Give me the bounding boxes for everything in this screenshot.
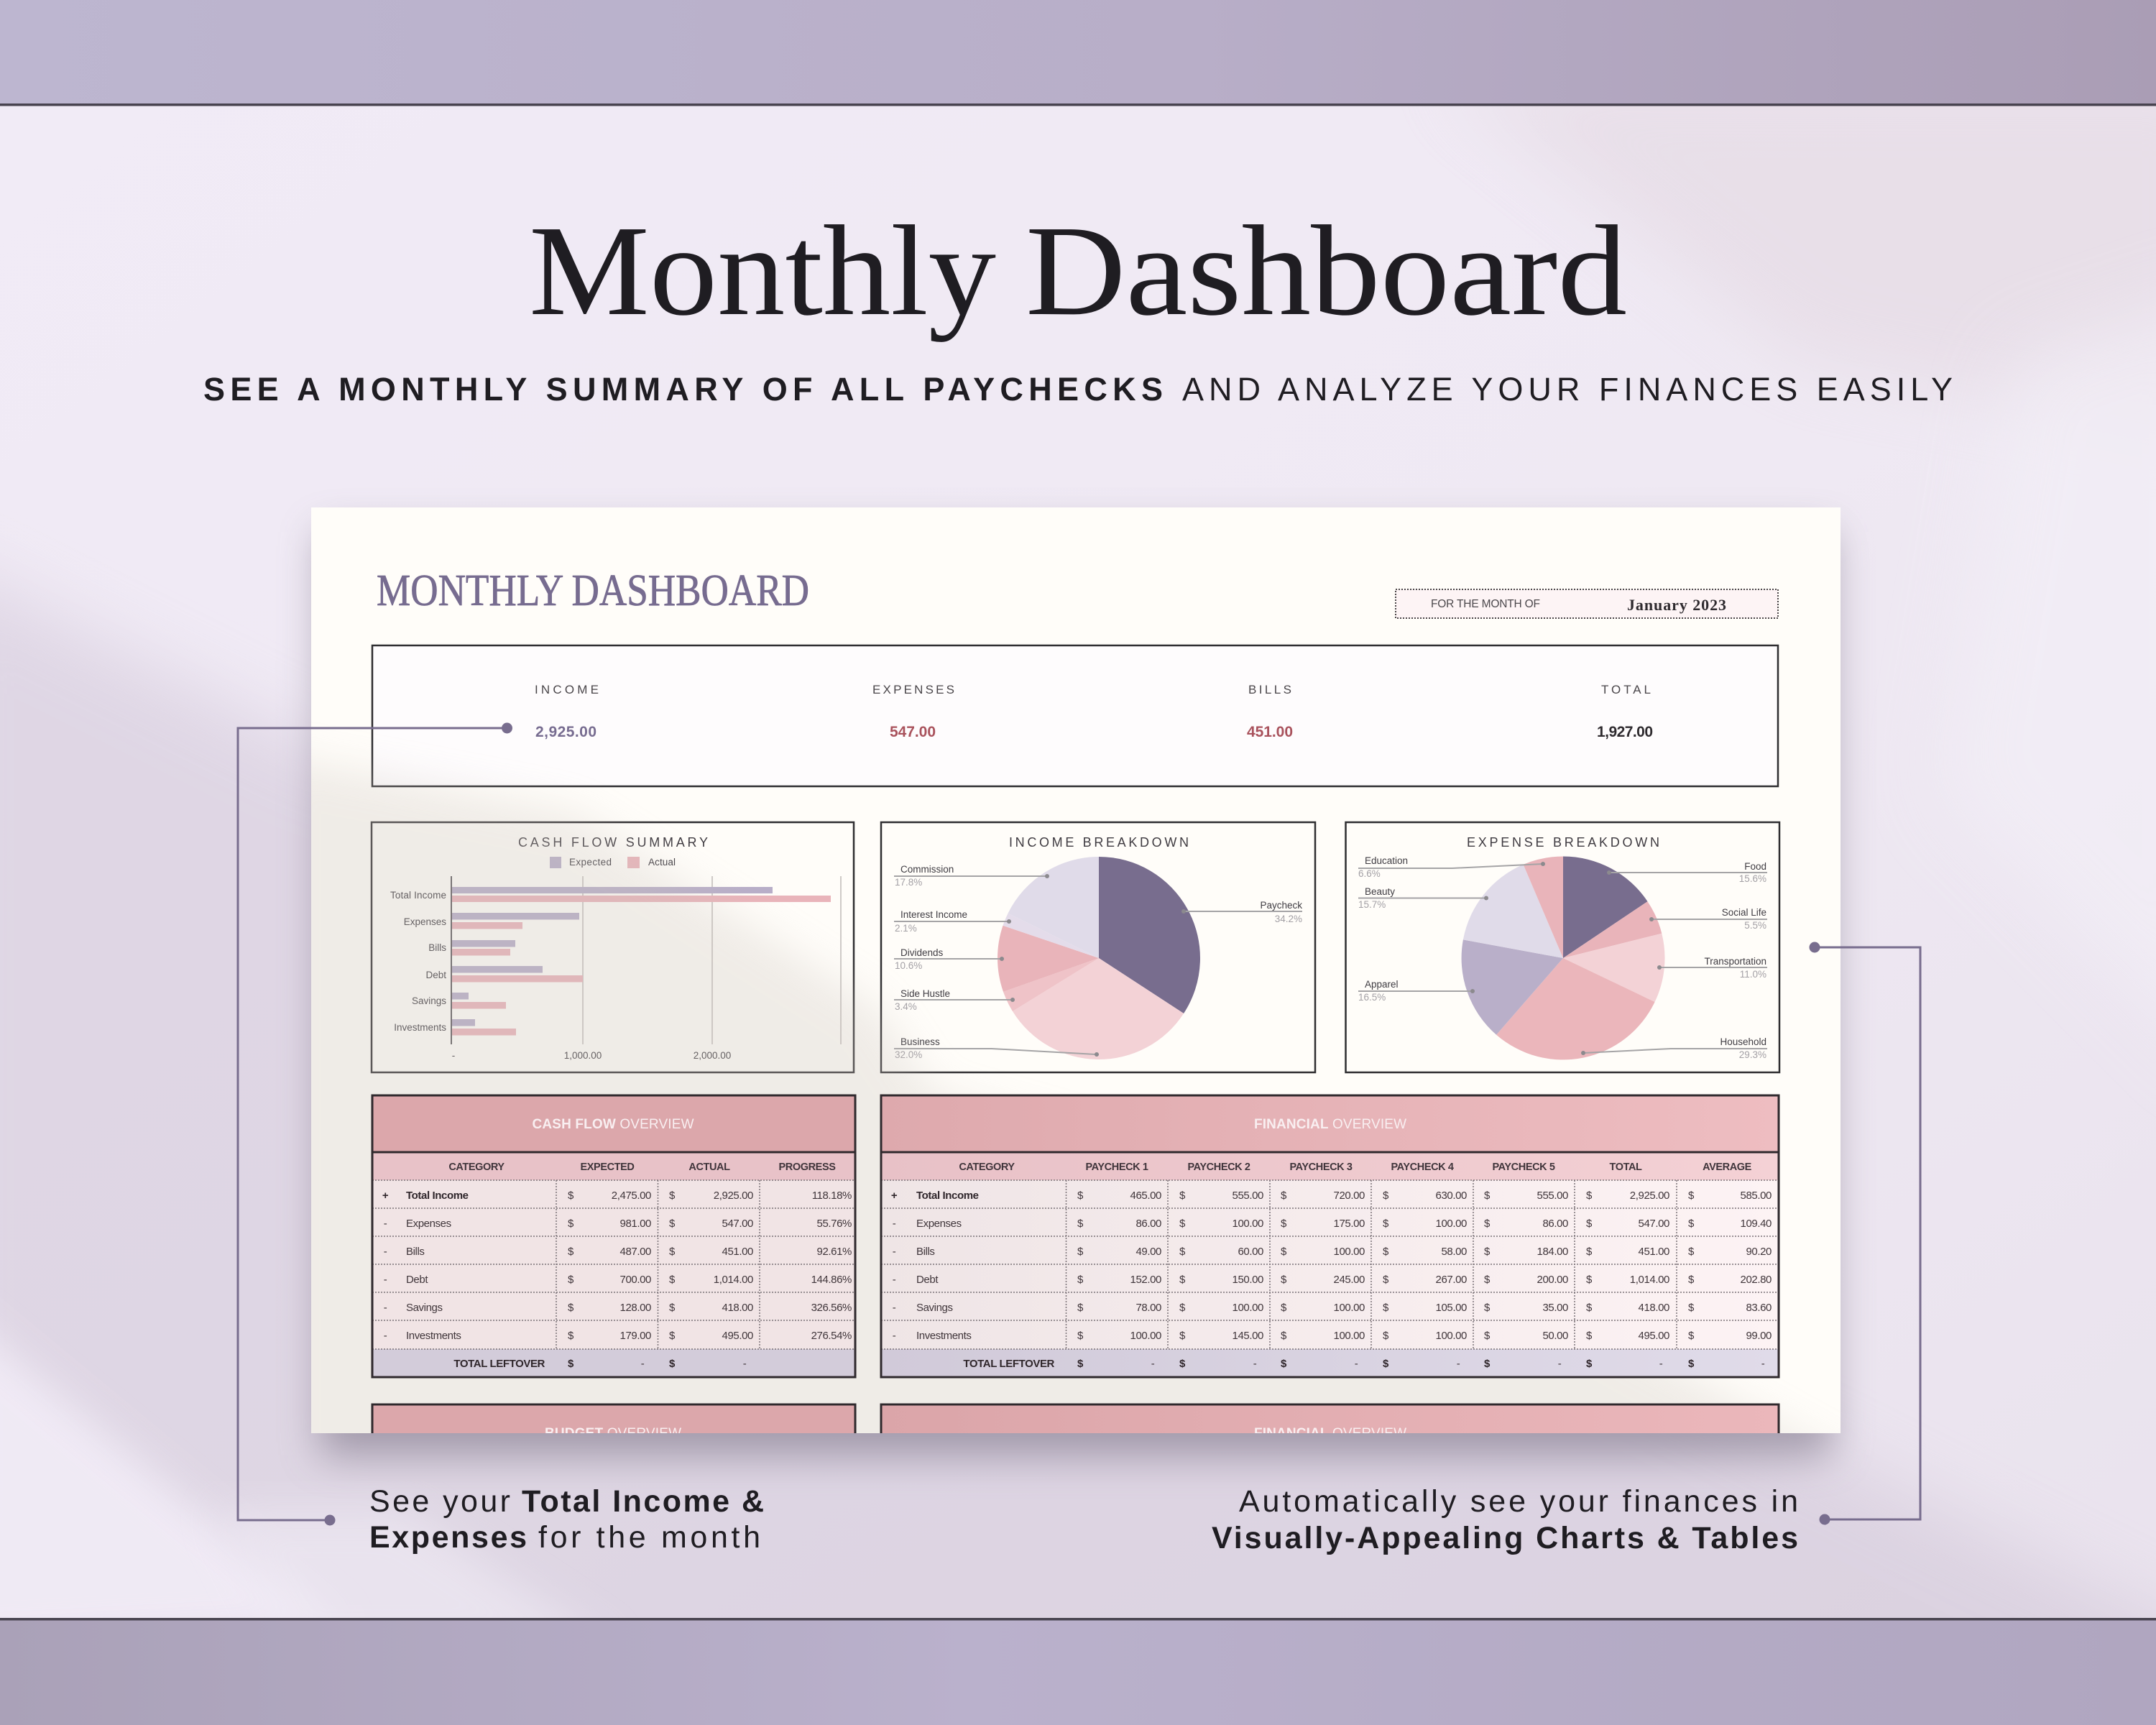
table header: EXPECTED xyxy=(581,1162,634,1173)
card shadow xyxy=(320,532,1833,1455)
callout: charts text xyxy=(1212,1484,1798,1555)
row: bills xyxy=(384,1246,852,1258)
summary expenses xyxy=(873,686,954,737)
row: total leftover: $ xyxy=(1383,1358,1389,1370)
row: bills: Bills xyxy=(406,1246,425,1258)
row: debt xyxy=(384,1274,852,1286)
title xyxy=(529,199,1627,342)
row: expenses xyxy=(893,1218,1772,1230)
callout: charts text: Automatically see your finances in xyxy=(1239,1484,1798,1519)
row: savings: 100.00 xyxy=(1233,1302,1263,1314)
summary total: 1,927.00 xyxy=(1597,724,1653,740)
row: expenses: Expenses xyxy=(406,1218,451,1230)
row: expenses: 100.00 xyxy=(1233,1218,1263,1230)
row: total income: 2,925.00 xyxy=(714,1190,753,1202)
title: Monthly xyxy=(529,199,996,342)
row: bills: $ xyxy=(568,1246,574,1258)
leader: apparel xyxy=(1358,979,1475,1003)
summary income: 2,925.00 xyxy=(535,724,596,740)
panel: cash flow overview table xyxy=(372,1095,855,1377)
row: savings: 128.00 xyxy=(620,1302,651,1314)
row: total income: 465.00 xyxy=(1130,1190,1161,1202)
table header: PAYCHECK 1 xyxy=(1085,1162,1148,1173)
row: debt: 200.00 xyxy=(1537,1274,1568,1286)
row: total leftover xyxy=(963,1358,1765,1370)
row: bills: 451.00 xyxy=(722,1246,753,1258)
row: expenses: 55.76% xyxy=(817,1218,852,1230)
row: expenses xyxy=(384,1218,852,1230)
row: total income: 555.00 xyxy=(1233,1190,1263,1202)
row: savings: Savings xyxy=(406,1302,443,1314)
table header: PAYCHECK 5 xyxy=(1492,1162,1555,1173)
row: bills: 487.00 xyxy=(620,1246,651,1258)
row: bills: 451.00 xyxy=(1639,1246,1669,1258)
row: total leftover: TOTAL LEFTOVER xyxy=(453,1358,545,1370)
leader: household: 29.3% xyxy=(1739,1049,1766,1060)
leader: business: 32.0% xyxy=(895,1049,922,1060)
axis labels: 1,000.00 xyxy=(564,1050,602,1061)
row: total leftover: $ xyxy=(568,1358,574,1370)
table header: PAYCHECK 3 xyxy=(1289,1162,1353,1173)
category labels: Total Income xyxy=(390,890,446,901)
row: investments: 99.00 xyxy=(1746,1330,1772,1342)
row: investments: - xyxy=(384,1330,387,1342)
row: debt: 1,014.00 xyxy=(714,1274,753,1286)
row: savings: $ xyxy=(1586,1302,1593,1314)
leader: paycheck: Paycheck xyxy=(1260,900,1302,911)
row: total income: $ xyxy=(1586,1190,1593,1202)
row: total leftover: - xyxy=(1558,1358,1562,1370)
leader: side hustle: 3.4% xyxy=(895,1001,917,1012)
row: savings: $ xyxy=(1383,1302,1389,1314)
row: total income xyxy=(891,1190,1772,1202)
leader: commission: Commission xyxy=(900,864,954,875)
leader: business: Business xyxy=(900,1036,940,1047)
leader: social life xyxy=(1649,907,1767,931)
row: investments: 100.00 xyxy=(1130,1330,1161,1342)
row: bills: $ xyxy=(1586,1246,1593,1258)
row: expenses: 109.40 xyxy=(1741,1218,1772,1230)
row: total income: 630.00 xyxy=(1436,1190,1467,1202)
row: bills xyxy=(893,1246,1772,1258)
row: savings: $ xyxy=(1077,1302,1084,1314)
leader: beauty xyxy=(1358,886,1488,910)
leader: food: 15.6% xyxy=(1739,873,1766,884)
row: investments: $ xyxy=(568,1330,574,1342)
leader: paycheck xyxy=(1181,900,1302,924)
legend: Actual xyxy=(648,857,676,868)
row: total income: 2,925.00 xyxy=(1630,1190,1669,1202)
leader: household: Household xyxy=(1720,1036,1766,1047)
legend: Expected xyxy=(569,857,612,868)
summary income xyxy=(535,683,599,740)
row: investments: $ xyxy=(669,1330,676,1342)
row: total income: 555.00 xyxy=(1537,1190,1568,1202)
table title: FINANCIAL OVERVIEW xyxy=(1254,1426,1406,1441)
chart title: EXPENSE BREAKDOWN xyxy=(1467,835,1659,850)
row: debt: 1,014.00 xyxy=(1630,1274,1669,1286)
table title: BUDGET OVERVIEW xyxy=(545,1426,681,1441)
table header xyxy=(448,1162,836,1173)
leader: food xyxy=(1607,861,1767,884)
leader: interest income: Interest Income xyxy=(900,909,967,920)
row: bills: $ xyxy=(669,1246,676,1258)
dashboard heading: MONTHLY DASHBOARD xyxy=(377,566,809,615)
category labels: Savings xyxy=(412,995,446,1006)
subtitle xyxy=(203,371,1953,408)
row: bills: 90.20 xyxy=(1746,1246,1772,1258)
row: savings: $ xyxy=(1179,1302,1186,1314)
panel: expense breakdown chart xyxy=(1345,822,1779,1072)
leader: side hustle xyxy=(894,988,1015,1012)
top band xyxy=(0,0,2156,106)
row: bills: - xyxy=(384,1246,387,1258)
row: total income: 2,475.00 xyxy=(612,1190,651,1202)
row: total income: $ xyxy=(1484,1190,1491,1202)
title: Dashboard xyxy=(1026,199,1627,342)
row: savings xyxy=(384,1302,852,1314)
row: total income: $ xyxy=(669,1190,676,1202)
summary bills xyxy=(1247,683,1293,740)
row: total leftover xyxy=(453,1358,747,1370)
leader: beauty: 15.7% xyxy=(1358,899,1386,910)
panel: cash flow summary chart xyxy=(372,822,854,1072)
callout: total income text: for the month xyxy=(538,1520,760,1555)
row: investments xyxy=(384,1330,852,1342)
summary bills: 451.00 xyxy=(1247,724,1293,740)
chart title: CASH FLOW SUMMARY xyxy=(518,835,708,850)
row: debt: - xyxy=(893,1274,896,1286)
row: debt: Debt xyxy=(916,1274,939,1286)
panel: summary xyxy=(372,645,1778,786)
row: investments: Investments xyxy=(406,1330,461,1342)
leader: business xyxy=(894,1036,1099,1060)
leader: education: Education xyxy=(1365,855,1408,866)
row: expenses: 86.00 xyxy=(1135,1218,1161,1230)
row: expenses: $ xyxy=(1077,1218,1084,1230)
subtitle: AND ANALYZE YOUR FINANCES EASILY xyxy=(1182,371,1953,408)
row: debt: 152.00 xyxy=(1130,1274,1161,1286)
row: investments: 145.00 xyxy=(1233,1330,1263,1342)
category labels: Debt xyxy=(425,970,446,980)
row: total income: $ xyxy=(1688,1190,1695,1202)
row: savings: $ xyxy=(1688,1302,1695,1314)
leader: dividends: Dividends xyxy=(900,947,944,958)
row: expenses: 981.00 xyxy=(620,1218,651,1230)
card light shading xyxy=(273,755,1883,1481)
row: debt: 150.00 xyxy=(1233,1274,1263,1286)
row: investments: Investments xyxy=(916,1330,971,1342)
row: bills: Bills xyxy=(916,1246,935,1258)
row: investments: 276.54% xyxy=(811,1330,852,1342)
leader: transportation: Transportation xyxy=(1704,956,1766,967)
leader: dividends xyxy=(894,947,1004,971)
row: savings xyxy=(893,1302,1772,1314)
row: debt: 144.86% xyxy=(811,1274,852,1286)
summary total xyxy=(1597,683,1653,740)
row: savings: 100.00 xyxy=(1334,1302,1365,1314)
row: debt: 245.00 xyxy=(1334,1274,1365,1286)
row: investments: 495.00 xyxy=(722,1330,753,1342)
row: investments: $ xyxy=(1077,1330,1084,1342)
leader: social life: Social Life xyxy=(1722,907,1766,918)
row: savings: $ xyxy=(669,1302,676,1314)
table header: ACTUAL xyxy=(688,1162,730,1173)
row: total leftover: - xyxy=(1253,1358,1257,1370)
row: debt: 267.00 xyxy=(1436,1274,1467,1286)
row: total leftover: $ xyxy=(1281,1358,1287,1370)
table header: TOTAL xyxy=(1610,1162,1642,1173)
row: total income: 720.00 xyxy=(1334,1190,1365,1202)
leader: education: 6.6% xyxy=(1358,868,1381,879)
row: expenses: $ xyxy=(1586,1218,1593,1230)
row: bills: 184.00 xyxy=(1537,1246,1568,1258)
table header: PAYCHECK 2 xyxy=(1187,1162,1250,1173)
row: bills: $ xyxy=(1484,1246,1491,1258)
arrow: charts callout connector xyxy=(1810,942,1920,1525)
row: savings: $ xyxy=(1281,1302,1287,1314)
bars: expected xyxy=(452,887,773,1026)
row: investments: 100.00 xyxy=(1334,1330,1365,1342)
row: investments: 179.00 xyxy=(620,1330,651,1342)
row: total income: Total Income xyxy=(406,1190,469,1202)
row: investments xyxy=(893,1330,1772,1342)
row: total leftover: TOTAL LEFTOVER xyxy=(963,1358,1055,1370)
row: bills: - xyxy=(893,1246,896,1258)
row: bills: 92.61% xyxy=(817,1246,852,1258)
table header: PROGRESS xyxy=(779,1162,836,1173)
chart title: INCOME BREAKDOWN xyxy=(1009,835,1189,850)
leader: apparel: Apparel xyxy=(1365,979,1399,990)
leader: side hustle: Side Hustle xyxy=(900,988,950,999)
leader: household xyxy=(1581,1036,1767,1060)
row: bills: $ xyxy=(1383,1246,1389,1258)
row: total income: Total Income xyxy=(916,1190,979,1202)
row: investments: $ xyxy=(1281,1330,1287,1342)
row: savings: Savings xyxy=(916,1302,953,1314)
row: debt: - xyxy=(384,1274,387,1286)
leader: transportation xyxy=(1657,956,1767,980)
table header: AVERAGE xyxy=(1703,1162,1752,1173)
row: total income xyxy=(382,1190,852,1202)
row: savings: 105.00 xyxy=(1436,1302,1467,1314)
row: debt: $ xyxy=(1179,1274,1186,1286)
legend xyxy=(550,857,676,868)
axis labels: 2,000.00 xyxy=(694,1050,731,1061)
row: bills: 58.00 xyxy=(1441,1246,1467,1258)
leader: social life: 5.5% xyxy=(1744,920,1766,931)
panel: dashboard card xyxy=(273,507,1883,1481)
row: total income: $ xyxy=(1179,1190,1186,1202)
leader: apparel: 16.5% xyxy=(1358,992,1386,1003)
row: savings: 326.56% xyxy=(811,1302,852,1314)
row: debt: Debt xyxy=(406,1274,428,1286)
row: debt: 202.80 xyxy=(1741,1274,1772,1286)
table header: PAYCHECK 4 xyxy=(1391,1162,1454,1173)
bottom band xyxy=(0,1618,2156,1725)
row: expenses: 547.00 xyxy=(722,1218,753,1230)
row: total leftover: $ xyxy=(1484,1358,1491,1370)
subtitle: SEE A MONTHLY SUMMARY OF ALL PAYCHECKS xyxy=(203,371,1163,408)
table header: CATEGORY xyxy=(448,1162,505,1173)
row: bills: 60.00 xyxy=(1238,1246,1263,1258)
row: total leftover: - xyxy=(1659,1358,1663,1370)
row: investments: $ xyxy=(1586,1330,1593,1342)
row: expenses: $ xyxy=(669,1218,676,1230)
category labels: Investments xyxy=(394,1022,446,1033)
row: savings: - xyxy=(893,1302,896,1314)
row: debt: $ xyxy=(1688,1274,1695,1286)
pie chart xyxy=(1462,857,1664,1059)
leader: beauty: Beauty xyxy=(1365,886,1395,897)
row: total leftover: $ xyxy=(1077,1358,1084,1370)
pie chart xyxy=(998,857,1200,1059)
callout: total income text: Total Income & xyxy=(522,1484,764,1519)
row: expenses: 86.00 xyxy=(1542,1218,1568,1230)
month selector: FOR THE MONTH OF xyxy=(1431,598,1540,610)
category labels xyxy=(390,890,446,1033)
row: total leftover: $ xyxy=(1688,1358,1695,1370)
row: expenses: Expenses xyxy=(916,1218,962,1230)
row: bills: $ xyxy=(1688,1246,1695,1258)
row: total income: 585.00 xyxy=(1741,1190,1772,1202)
callout: charts text: Visually-Appealing Charts & Tables xyxy=(1212,1521,1798,1555)
row: total leftover: - xyxy=(1355,1358,1358,1370)
row: savings: - xyxy=(384,1302,387,1314)
category labels: Bills xyxy=(428,942,446,953)
arrow: income callout connector xyxy=(238,723,512,1525)
row: total leftover: $ xyxy=(1179,1358,1186,1370)
callout: total income text: See your xyxy=(369,1484,510,1519)
axis labels xyxy=(452,1050,731,1061)
row: savings: 418.00 xyxy=(722,1302,753,1314)
leader: interest income xyxy=(894,909,1011,934)
leader: education xyxy=(1358,855,1545,879)
row: debt: $ xyxy=(1383,1274,1389,1286)
row: debt: $ xyxy=(1077,1274,1084,1286)
row: debt: $ xyxy=(1586,1274,1593,1286)
row: savings: 35.00 xyxy=(1542,1302,1568,1314)
leader: food: Food xyxy=(1744,861,1766,872)
panel: financial overview table xyxy=(881,1095,1779,1377)
row: total income: 118.18% xyxy=(812,1190,852,1202)
category labels: Expenses xyxy=(404,916,446,927)
row: bills: 100.00 xyxy=(1334,1246,1365,1258)
row: savings: $ xyxy=(568,1302,574,1314)
row: debt: $ xyxy=(669,1274,676,1286)
row: expenses: - xyxy=(893,1218,896,1230)
leader: commission: 17.8% xyxy=(895,877,922,888)
summary expenses: EXPENSES xyxy=(872,683,954,696)
month selector xyxy=(1396,589,1778,618)
row: expenses: 175.00 xyxy=(1334,1218,1365,1230)
row: investments: $ xyxy=(1383,1330,1389,1342)
row: total leftover: - xyxy=(1761,1358,1765,1370)
row: total leftover: - xyxy=(1151,1358,1155,1370)
summary expenses: 547.00 xyxy=(890,724,936,740)
table title: CASH FLOW OVERVIEW xyxy=(532,1117,694,1132)
table header xyxy=(959,1162,1752,1173)
summary income: INCOME xyxy=(535,683,599,696)
row: investments: $ xyxy=(1179,1330,1186,1342)
leader: dividends: 10.6% xyxy=(895,960,922,971)
row: expenses: 100.00 xyxy=(1436,1218,1467,1230)
row: expenses: 547.00 xyxy=(1639,1218,1669,1230)
row: total leftover: - xyxy=(641,1358,645,1370)
row: total income: $ xyxy=(1281,1190,1287,1202)
bars: actual xyxy=(452,896,831,1035)
panel: income breakdown chart xyxy=(881,822,1315,1072)
row: investments: 50.00 xyxy=(1542,1330,1568,1342)
row: total income: $ xyxy=(1383,1190,1389,1202)
row: debt: $ xyxy=(1281,1274,1287,1286)
row: investments: - xyxy=(893,1330,896,1342)
row: total leftover: $ xyxy=(669,1358,676,1370)
row: total leftover: - xyxy=(743,1358,747,1370)
row: expenses: $ xyxy=(1688,1218,1695,1230)
row: investments: $ xyxy=(1484,1330,1491,1342)
row: expenses: - xyxy=(384,1218,387,1230)
summary total: TOTAL xyxy=(1601,683,1651,696)
leader: commission xyxy=(894,864,1049,888)
table title: FINANCIAL OVERVIEW xyxy=(1254,1117,1406,1132)
row: bills: 49.00 xyxy=(1135,1246,1161,1258)
row: expenses: $ xyxy=(1179,1218,1186,1230)
row: investments: $ xyxy=(1688,1330,1695,1342)
row: investments: 495.00 xyxy=(1639,1330,1669,1342)
row: bills: $ xyxy=(1077,1246,1084,1258)
row: expenses: $ xyxy=(1484,1218,1491,1230)
row: savings: 418.00 xyxy=(1639,1302,1669,1314)
row: total income: + xyxy=(382,1190,389,1202)
row: total leftover: $ xyxy=(1586,1358,1593,1370)
row: savings: 78.00 xyxy=(1135,1302,1161,1314)
row: investments: 100.00 xyxy=(1436,1330,1467,1342)
row: bills: $ xyxy=(1281,1246,1287,1258)
leader: interest income: 2.1% xyxy=(895,923,917,934)
table header: CATEGORY xyxy=(959,1162,1015,1173)
callout: total income text xyxy=(369,1484,764,1555)
row: debt: $ xyxy=(1484,1274,1491,1286)
row: expenses: $ xyxy=(568,1218,574,1230)
panel: budget overview table (cropped) xyxy=(372,1404,855,1445)
panel: financial overview table 2 (cropped) xyxy=(881,1404,1779,1445)
row: total income: + xyxy=(891,1190,898,1202)
row: debt xyxy=(893,1274,1772,1286)
row: total leftover: - xyxy=(1457,1358,1460,1370)
row: bills: $ xyxy=(1179,1246,1186,1258)
row: expenses: $ xyxy=(1281,1218,1287,1230)
row: savings: 83.60 xyxy=(1746,1302,1772,1314)
row: debt: $ xyxy=(568,1274,574,1286)
row: total income: $ xyxy=(1077,1190,1084,1202)
month selector: January 2023 xyxy=(1627,596,1726,614)
row: savings: $ xyxy=(1484,1302,1491,1314)
leader: paycheck: 34.2% xyxy=(1275,914,1302,924)
summary bills: BILLS xyxy=(1248,683,1291,696)
row: expenses: $ xyxy=(1383,1218,1389,1230)
axis labels: - xyxy=(452,1050,455,1061)
leader: transportation: 11.0% xyxy=(1740,969,1766,980)
row: debt: 700.00 xyxy=(620,1274,651,1286)
row: total income: $ xyxy=(568,1190,574,1202)
callout: total income text: Expenses xyxy=(369,1520,527,1555)
